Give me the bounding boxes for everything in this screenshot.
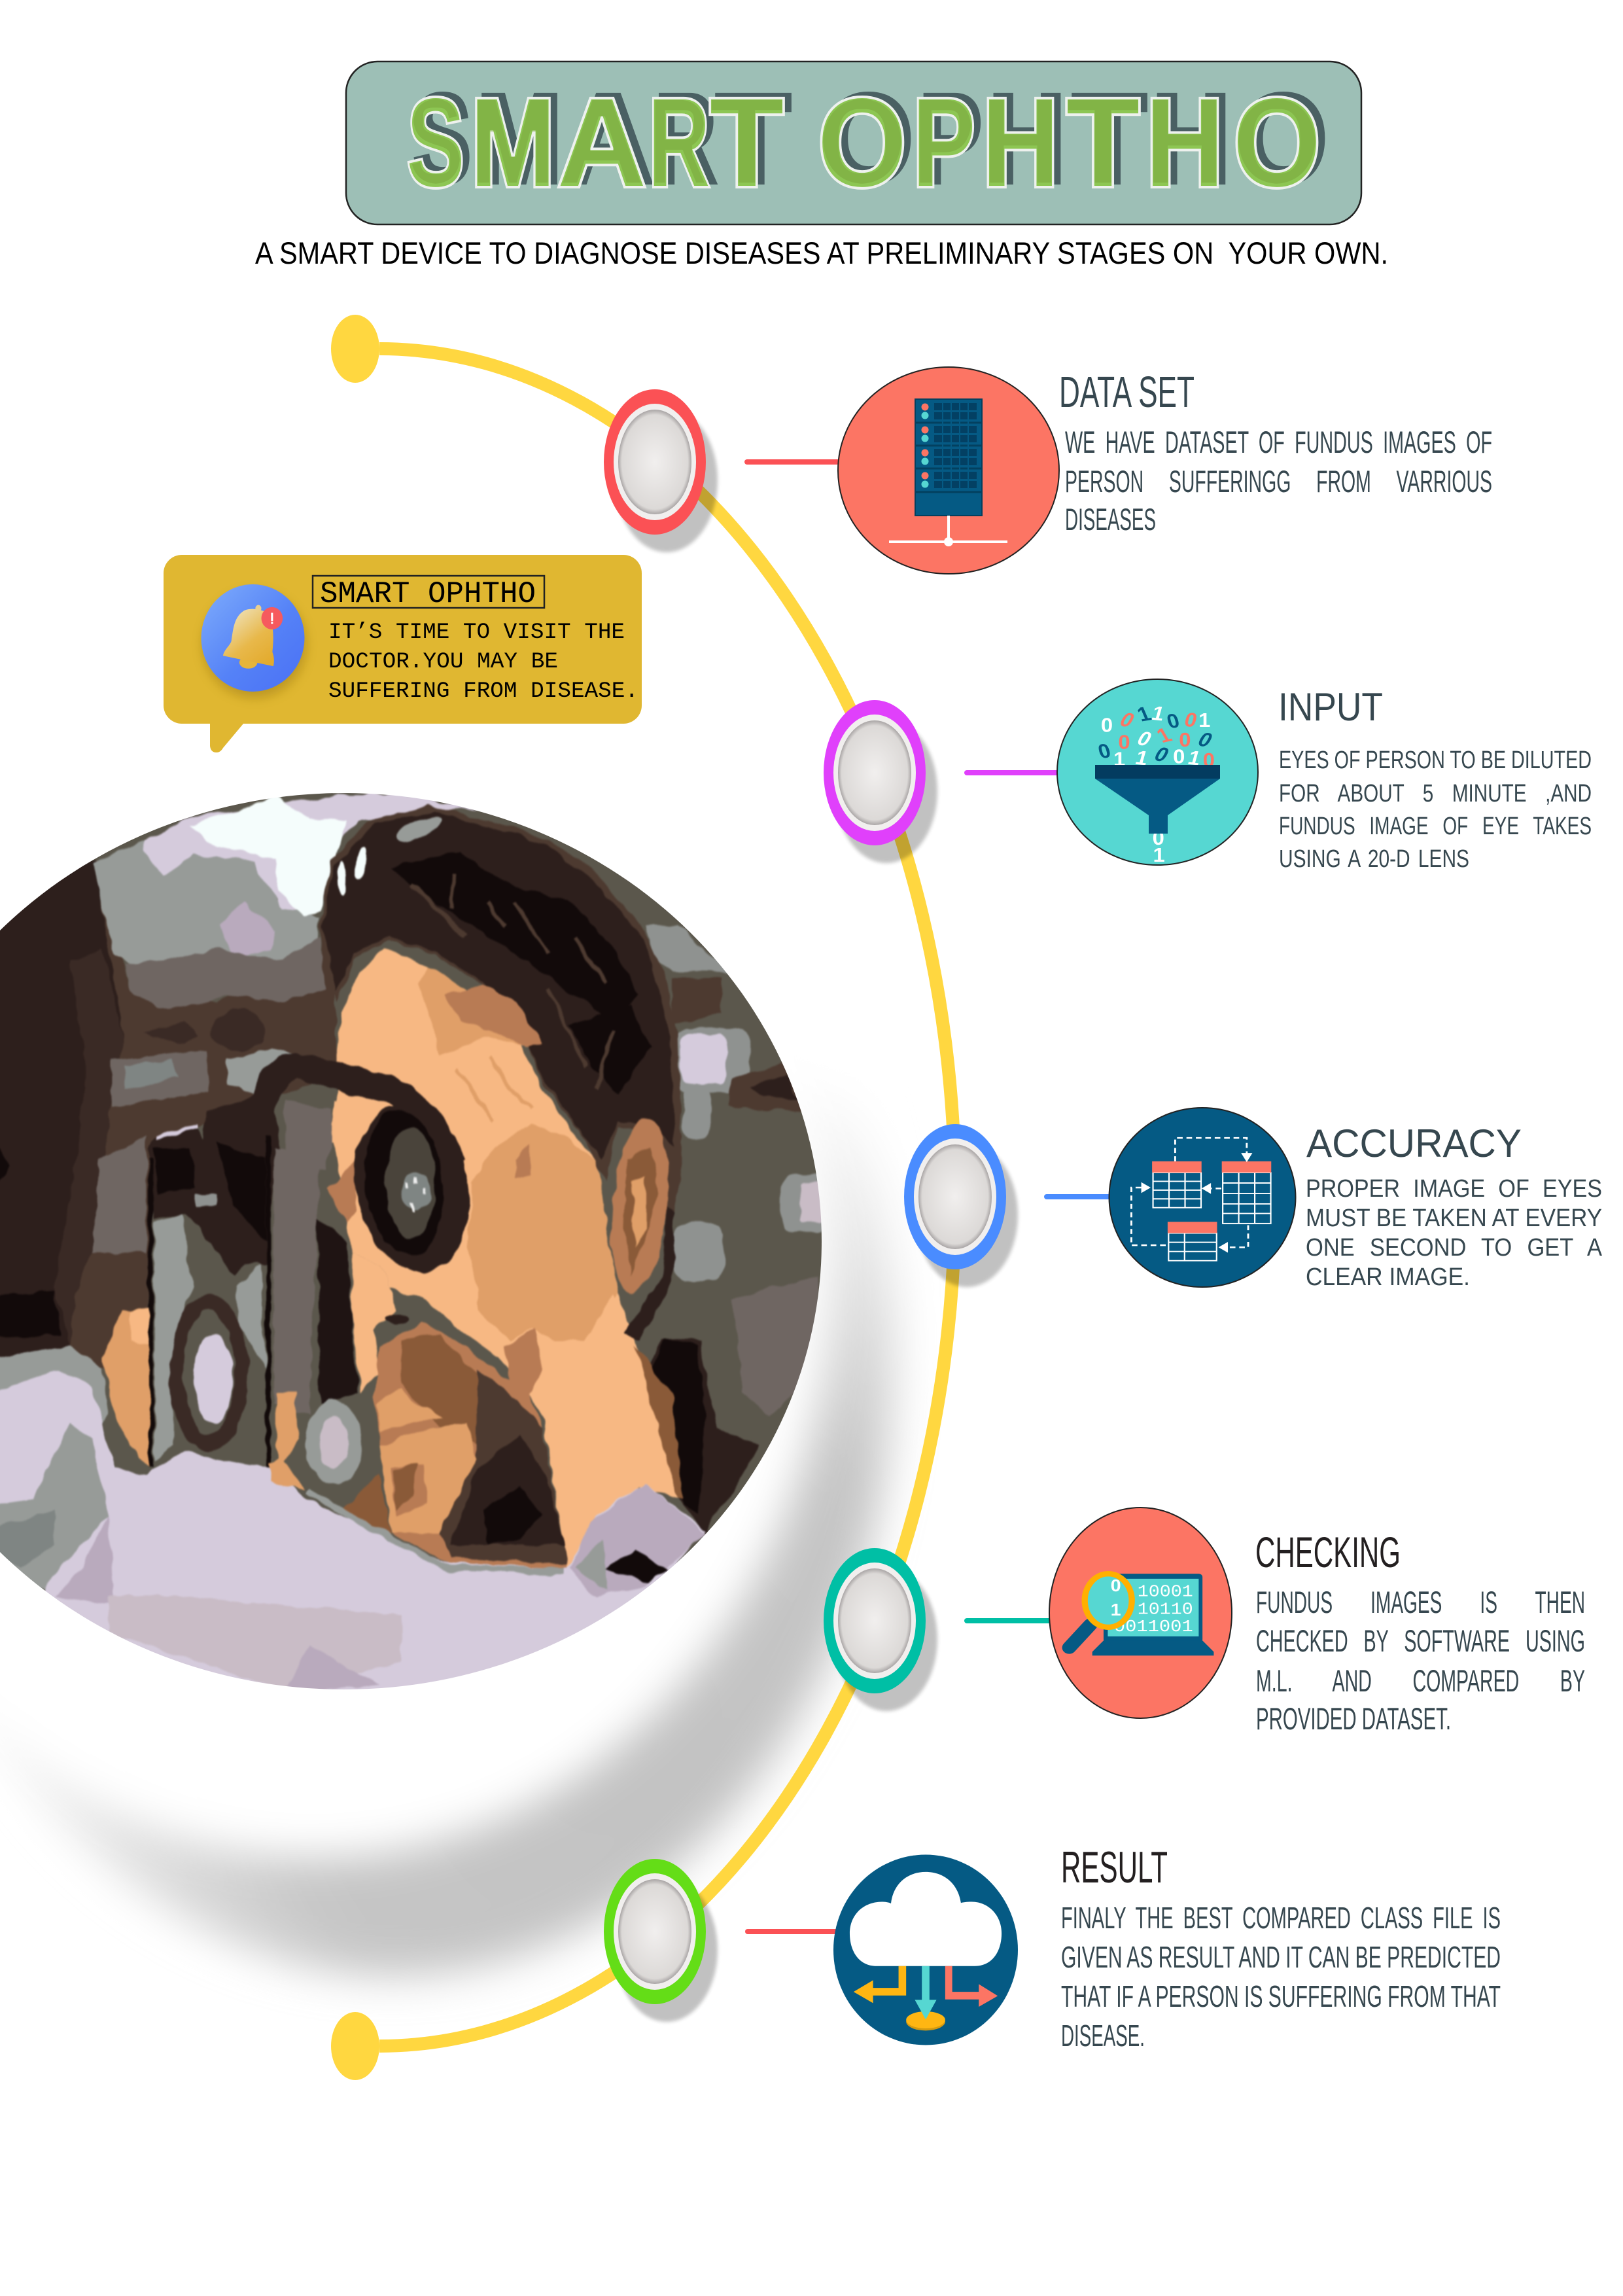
title text: P: [913, 72, 975, 213]
step 2 icon: data funnel: 0: [1118, 731, 1130, 753]
step 3 text: CLEAR IMAGE.: [1306, 1263, 1470, 1291]
step 3 text: MUST BE TAKEN AT EVERY: [1306, 1205, 1602, 1232]
photo drop shadow: [0, 694, 896, 1976]
step 2 icon: data funnel: 1: [1198, 709, 1210, 732]
connector: checking: [964, 1618, 1056, 1623]
step 2 icon: data funnel: 0: [1150, 743, 1174, 766]
step 3 text: ONE SECOND TO GET A: [1306, 1234, 1603, 1262]
step 3 text: [1306, 1175, 1603, 1291]
step 2 icon: data funnel: 0: [1203, 749, 1215, 771]
arc bottom end dot: [331, 2012, 379, 2080]
step 2 icon: data funnel: 1: [1133, 747, 1151, 769]
step 3 heading: ACCURACY: [1306, 1122, 1522, 1165]
bubble message: SUFFERING FROM DISEASE.: [328, 679, 638, 704]
step 5 icon: cloud with arrows: [833, 1854, 1018, 2045]
step 2 icon: data funnel: 0: [1096, 739, 1113, 763]
step 2 icon: data funnel: 0: [1179, 729, 1191, 751]
step 4 text: [1256, 1585, 1585, 1736]
node 1: [604, 389, 718, 552]
step 2 icon: data funnel: 0: [1173, 745, 1185, 768]
step 1 heading: DATA SET: [1059, 368, 1195, 417]
step 2 icon: data funnel: 0: [1115, 708, 1139, 732]
step 2 icon: data funnel: 0: [1182, 709, 1200, 732]
node 3: [904, 1124, 1018, 1287]
step 4 icon: laptop and magnifier: 0: [1111, 1576, 1121, 1595]
node 2: [824, 700, 937, 863]
title text: A: [557, 72, 646, 213]
step 2 icon: data funnel: 1: [1134, 703, 1155, 726]
step 2 icon: data funnel: 0: [1153, 827, 1164, 849]
title text: O: [818, 72, 907, 213]
bubble message: DOCTOR.YOU MAY BE: [328, 650, 558, 675]
title text: O: [1233, 72, 1321, 213]
bubble message: IT’S TIME TO VISIT THE: [328, 620, 625, 645]
icon: notification bell: [201, 584, 307, 698]
title text: H: [982, 72, 1059, 213]
step 2 icon: data funnel: 0: [1164, 709, 1182, 733]
title text: T: [1066, 72, 1140, 213]
step 4 icon: laptop and magnifier: 0011001: [1114, 1618, 1193, 1637]
step 2 heading: INPUT: [1278, 685, 1383, 729]
connector: input: [964, 770, 1062, 775]
title text: T: [710, 72, 784, 213]
step 2 icon: data funnel: 0: [1101, 714, 1113, 736]
step 2 icon: data funnel: [1057, 679, 1258, 866]
subtitle: A SMART DEVICE TO DIAGNOSE DISEASES AT PRELIMINARY STAGES ON YOUR OWN.: [255, 236, 1388, 270]
title text: S: [407, 72, 464, 213]
step 1 icon: server rack: [838, 367, 1059, 574]
step 4 icon: laptop and magnifier: [1049, 1508, 1232, 1718]
arc top end dot: [331, 315, 379, 383]
step 2 icon: data funnel: 0: [1133, 727, 1156, 751]
step 5 text: DISEASE.: [1061, 2019, 1145, 2053]
bubble heading: SMART OPHTHO: [320, 577, 536, 611]
title text: [407, 72, 1321, 213]
step 1 text: DISEASES: [1065, 502, 1156, 537]
step 4 icon: laptop and magnifier: 1: [1111, 1600, 1121, 1619]
title text: M: [470, 72, 555, 213]
node 5: [604, 1859, 718, 2022]
step 3 icon: linked tables: [1109, 1108, 1295, 1287]
curved timeline arc: [379, 349, 955, 2046]
step 4 icon: laptop and magnifier: 10001: [1138, 1583, 1193, 1602]
title text: H: [1145, 72, 1224, 213]
step 2 icon: data funnel: 1: [1153, 844, 1165, 866]
title banner: [346, 62, 1361, 224]
bubble message: [328, 620, 638, 704]
step 4 icon: laptop and magnifier: 10110: [1138, 1600, 1193, 1619]
connector: data set: [744, 459, 843, 465]
step 5 heading: RESULT: [1061, 1843, 1168, 1892]
step 2 text: [1279, 747, 1592, 873]
connector: result: [745, 1929, 840, 1934]
step 4 heading: CHECKING: [1255, 1528, 1401, 1576]
step 2 icon: data funnel: 0: [1194, 728, 1217, 752]
title text: R: [648, 72, 710, 213]
node 4: [824, 1548, 937, 1711]
step 1 text: [1065, 425, 1492, 537]
step 2 icon: data funnel: 1: [1113, 749, 1125, 771]
step 5 text: [1061, 1901, 1501, 2053]
notification bubble: [164, 555, 642, 752]
photo: person using smartphone ophthalmoscope: [0, 793, 822, 1689]
step 2 icon: data funnel: 1: [1185, 747, 1204, 769]
step 4 text: PROVIDED DATASET.: [1256, 1701, 1451, 1736]
connector: accuracy: [1044, 1194, 1116, 1199]
step 2 icon: data funnel: 1: [1153, 724, 1176, 747]
step 2 icon: data funnel: 1: [1149, 702, 1167, 725]
step 2 text: USING A 20-D LENS: [1279, 845, 1469, 873]
